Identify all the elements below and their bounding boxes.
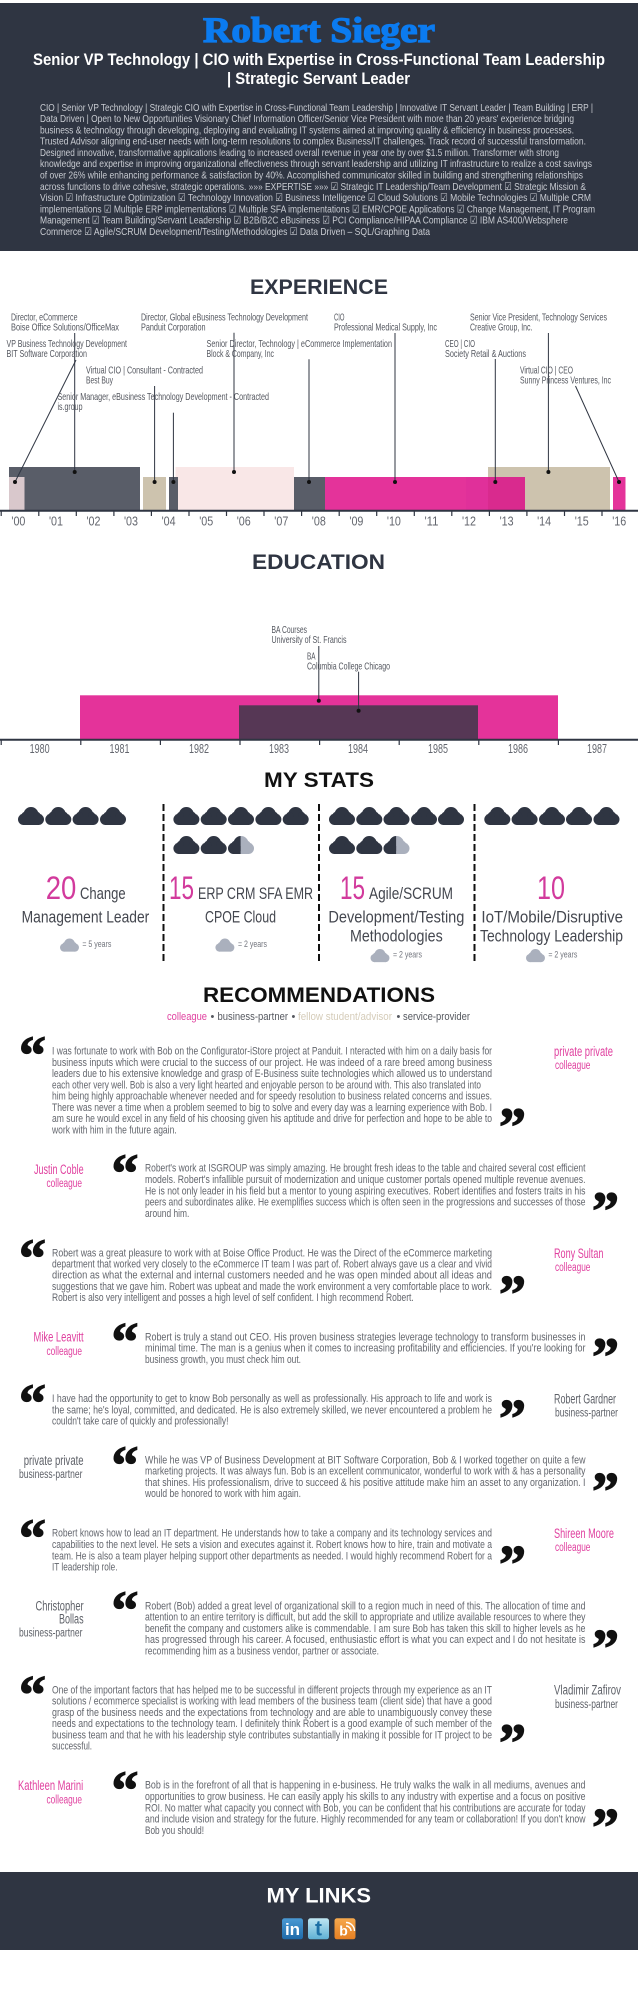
cloud legend [370, 949, 422, 962]
recommendation: Mike Leavitt [34, 1312, 619, 1387]
axis year labels: '11 [424, 514, 438, 529]
recommendation: private private, colleague: colleague [555, 1060, 590, 1072]
education year labels: 1987 [587, 741, 607, 756]
position labels: CEO | CIO [445, 338, 475, 350]
recommendation: Robert Gardner: couldn't take care of quickly and professionally! [52, 1416, 228, 1428]
recommendation: Christopher Bollas [19, 1580, 619, 1678]
recommendation: private private, colleague [19, 1025, 613, 1157]
recommendation: Kathleen Marini: Bob you should! [145, 1825, 204, 1837]
recommendation: private private, business-partner: “ [112, 1435, 138, 1495]
recommendation: Shireen Moore: “ [19, 1508, 46, 1568]
heading: recommendations: RECOMMENDATIONS [203, 984, 435, 1007]
axis year labels: '00 [11, 514, 25, 529]
position labels: Director, Global eBusiness Technology Development [141, 312, 308, 324]
recommendation: Shireen Moore: team. He is also a team player helping support other departments as needed. I would highly recommend Robert for a [52, 1550, 492, 1562]
recommendation: Rony Sultan: department that worked very closely to the eCommerce IT team I was part of. Robert always gave us a clear and vivid [52, 1258, 492, 1270]
recommendation: private private, business-partner: would be honored to work with him again. [144, 1488, 301, 1500]
recommendation: private private, colleague: I was fortunate to work with Bob on the Configurator-iStore project at Panduit. I nteracted with him on a daily basis for [52, 1046, 492, 1058]
axis year labels: '09 [349, 514, 363, 529]
recommendation: Shireen Moore: Robert knows how to lead an IT department. He understands how to take a company and its technology services and [52, 1528, 492, 1540]
education labels: Columbia College Chicago [307, 660, 390, 672]
recommendation: private private, colleague: him being highly approachable whenever needed and for speedy resolution to business related concerns and issues. [52, 1090, 492, 1102]
education leader lines [317, 646, 361, 713]
recommendation: Shireen Moore: ” [499, 1534, 526, 1594]
subtitle: | Strategic Servant Leader [227, 69, 410, 88]
position labels: Professional Medical Supply, Inc [334, 322, 437, 334]
recommendation: private private, colleague: private private [554, 1044, 613, 1059]
stat: ERP CRM SFA EMR CPOE Cloud: 15 [169, 870, 194, 906]
education year labels: 1986 [508, 741, 528, 756]
stat: ERP CRM SFA EMR CPOE Cloud: CPOE Cloud [205, 908, 276, 926]
axis year labels: '04 [162, 514, 176, 529]
recommendation: Kathleen Marini: “ [112, 1760, 138, 1820]
recommendation type legend: fellow student/advisor [298, 1011, 392, 1023]
icon: linkedin [282, 1918, 303, 1939]
stat: agile scrum: Agile/SCRUM [369, 884, 453, 903]
cloud pictogram [329, 807, 464, 854]
education labels: BA Courses [272, 624, 307, 636]
recommendation: Shireen Moore [19, 1508, 614, 1594]
recommendation: Christopher Bollas: business-partner [19, 1627, 83, 1639]
position labels: CIO [334, 312, 344, 324]
axis year labels: '05 [199, 514, 213, 529]
axis year labels: '03 [124, 514, 138, 529]
icon: blog: b [339, 1922, 348, 1938]
axis year labels: '15 [575, 514, 589, 529]
axis year labels: '01 [49, 514, 63, 529]
axis year labels: '16 [612, 514, 626, 529]
recommendation: Vladimir Zafirov: successful. [52, 1740, 92, 1752]
recommendation: Christopher Bollas: Bollas [59, 1612, 84, 1627]
cloud legend [526, 949, 578, 962]
icon: linkedin: in [285, 1920, 300, 1939]
dashed dividers [164, 804, 474, 961]
stat: iot mobile disruptive: 10 [537, 870, 565, 906]
recommendation: Kathleen Marini [18, 1760, 619, 1858]
recommendation: Justin Coble: ” [592, 1181, 619, 1241]
position labels: Virtual CIO | Consultant - Contracted [86, 365, 203, 377]
axis year labels: '13 [500, 514, 514, 529]
recommendation: Justin Coble: “ [112, 1143, 138, 1203]
recommendation: Rony Sultan: Rony Sultan [554, 1246, 603, 1261]
recommendation: private private, business-partner [19, 1435, 619, 1521]
timeline bars [9, 467, 626, 510]
position labels: Panduit Corporation [141, 322, 206, 334]
recommendation: Justin Coble: colleague [46, 1178, 82, 1190]
stat: change management leader: Change [80, 884, 126, 903]
recommendation: Mike Leavitt: business growth, you must check him out. [145, 1354, 301, 1366]
education year labels [30, 741, 607, 756]
axis year labels: '12 [462, 514, 476, 529]
recommendation: private private, business-partner: ” [592, 1461, 619, 1521]
stat: agile scrum: 15 [340, 870, 365, 906]
education axis [0, 740, 638, 745]
position labels: Best Buy [86, 375, 113, 387]
recommendation: private private, colleague: “ [19, 1025, 46, 1085]
recommendation: Rony Sultan: colleague [555, 1262, 590, 1274]
position labels: Block & Company, Inc [206, 348, 274, 360]
position labels: BIT Software Corporation [6, 348, 87, 360]
icon: twitter: t [315, 1918, 322, 1940]
recommendation: Robert Gardner: I have had the opportunity to get to know Bob personally as well as professionally. His approach to life and work is [52, 1393, 492, 1405]
position labels: Society Retail & Auctions [445, 348, 526, 360]
stat: agile scrum: Development/Testing [328, 908, 464, 926]
stat: change management leader: 20 [46, 870, 76, 906]
education bars [80, 695, 558, 739]
recommendation: Shireen Moore: IT leadership role. [52, 1562, 118, 1574]
axis year labels: '14 [537, 514, 551, 529]
recommendation: Vladimir Zafirov: grasp of the business needs and the expectations from technology and are able to unambiguously convey these [52, 1707, 492, 1719]
recommendation: Rony Sultan: Robert was a great pleasure to work with at Boise Office Product. He was the Direct of the eCommerce marketing [52, 1247, 492, 1259]
recommendation: Mike Leavitt: Mike Leavitt [34, 1330, 84, 1345]
education labels [272, 624, 390, 672]
recommendation: Justin Coble [34, 1143, 619, 1241]
icon: blog [334, 1918, 356, 1939]
education year labels: 1981 [110, 741, 130, 756]
heading: experience: EXPERIENCE [250, 276, 388, 299]
position labels: Senior Director, Technology | eCommerce Implementation [206, 338, 392, 350]
timeline axis [0, 511, 638, 516]
position labels: Senior Manager, eBusiness Technology Development - Contracted [58, 391, 269, 403]
recommendation: Christopher Bollas: recommending him as a business vendor, partner or associate. [145, 1646, 379, 1658]
header panel [0, 3, 638, 251]
title: Robert Sieger [203, 10, 435, 50]
education year labels: 1982 [189, 741, 209, 756]
position labels: Director, eCommerce [11, 312, 78, 324]
recommendation: Vladimir Zafirov [19, 1665, 621, 1773]
heading: my links: MY LINKS [266, 1885, 371, 1908]
recommendation: Kathleen Marini: colleague [46, 1794, 82, 1806]
recommendation: Robert Gardner [19, 1373, 618, 1448]
education timeline chart [0, 624, 638, 756]
recommendation: private private, colleague: am sure he would excel in any field of his choosing given his aptitude and drive for perfection and hope to be able to [52, 1113, 492, 1125]
recommendation: Justin Coble: Justin Coble [34, 1162, 84, 1177]
recommendation: private private, colleague: work with him in the future again. [51, 1124, 177, 1136]
stat: agile scrum [328, 807, 464, 962]
recommendation type legend: colleague [167, 1011, 207, 1023]
cloud pictogram [484, 807, 620, 825]
recommendation: private private, colleague: ” [499, 1097, 526, 1157]
recommendation: Shireen Moore: capabilities to the next level. He sets a vision and executes against it. Robert knows how to hire, train and motivate a [52, 1539, 492, 1551]
cloud legend: = 2 years [238, 939, 267, 949]
recommendation: Christopher Bollas: ” [592, 1618, 619, 1678]
heading: education: EDUCATION [252, 551, 385, 574]
recommendation: Rony Sultan: direction as what the external and internal customers needed and he was open minded about all ideas and [52, 1270, 492, 1282]
recommendation type legend: business-partner [218, 1011, 288, 1023]
recommendation: Vladimir Zafirov: needs and expectations to the technology team. I definitely think Robert is a good example of such member of the [52, 1718, 492, 1730]
recommendation type legend [167, 1011, 470, 1023]
recommendation type legend: • [210, 1011, 214, 1023]
leader lines and dots [13, 333, 621, 484]
profile summary text [40, 102, 595, 238]
recommendation: Robert Gardner: ” [499, 1388, 526, 1448]
recommendation: Kathleen Marini: Kathleen Marini [18, 1778, 83, 1793]
recommendation: Rony Sultan: “ [19, 1228, 46, 1288]
recommendation: private private, colleague: each other very well. Bob is also a very light hearted and enjoyable person to be around with. This also translated into [52, 1079, 481, 1091]
axis year labels: '10 [387, 514, 401, 529]
recommendation: Rony Sultan [19, 1228, 603, 1325]
recommendation: Robert Gardner: “ [19, 1373, 46, 1433]
recommendation: private private, colleague: There was never a time when a problem seemed to big to solve and every day was a learning experience with Bob. I [52, 1102, 492, 1114]
profile summary text: Commerce ☑ Agile/SCRUM Development/Testing/Methodologies ☑ Data Driven – SQL/Graphing Data [40, 226, 430, 238]
stat: iot mobile disruptive: IoT/Mobile/Disruptive [481, 908, 623, 926]
cloud pictogram [173, 807, 309, 854]
stat: agile scrum: Methodologies [350, 927, 443, 946]
stat: ERP CRM SFA EMR CPOE Cloud: ERP CRM SFA EMR [198, 884, 313, 903]
cloud legend [215, 938, 267, 952]
recommendation: Vladimir Zafirov: “ [19, 1665, 46, 1725]
recommendation: Christopher Bollas: Christopher [36, 1599, 84, 1614]
axis year labels: '08 [312, 514, 326, 529]
recommendation: Justin Coble: around him. [145, 1208, 189, 1220]
stat: ERP CRM SFA EMR CPOE Cloud [169, 807, 313, 952]
recommendation: private private, business-partner: business-partner [19, 1469, 83, 1481]
recommendation: Mike Leavitt: colleague [46, 1346, 82, 1358]
recommendation type legend: service-provider [403, 1011, 470, 1023]
education year labels: 1985 [428, 741, 448, 756]
recommendation type legend: • [292, 1011, 296, 1023]
stat: change management leader: Management Leader [22, 908, 150, 926]
stat: change management leader [18, 807, 150, 952]
position labels [6, 312, 611, 413]
position labels: Virtual CIO | CEO [520, 365, 573, 377]
cloud legend: = 2 years [548, 950, 578, 960]
footer panel: my links [0, 1872, 638, 1950]
heading: my stats: MY STATS [264, 769, 374, 792]
position labels: is.group [58, 401, 83, 413]
recommendation: Robert Gardner: the same; he's loyal, committed, and dedicated. He is also extremely skilled, we never encountered a problem he [52, 1404, 492, 1416]
education year labels: 1980 [30, 741, 50, 756]
recommendation: Christopher Bollas: “ [112, 1580, 138, 1640]
recommendation: Vladimir Zafirov: business team and that he with his leadership style contributes substantially in making it possible for IT project to be [52, 1730, 492, 1742]
education year labels: 1984 [348, 741, 368, 756]
cloud legend [60, 938, 112, 952]
stats panel [18, 804, 623, 962]
education labels: University of St. Francis [272, 634, 346, 646]
recommendation: private private, business-partner: private private [24, 1453, 84, 1468]
cloud legend: = 2 years [393, 950, 422, 960]
recommendation: private private, colleague: leaders due to his extensive knowledge and grasp of E-Business suite technologies which allowed us to understand [52, 1068, 492, 1080]
recommendation: Rony Sultan: Robert is also very intelligent and posses a high level of self confident. I high recommend Robert. [52, 1292, 414, 1304]
recommendation: Rony Sultan: suggestions that we gave him. Robert was upbeat and made the work environment a very comfortable place to work. [52, 1281, 492, 1293]
axis year labels [11, 514, 626, 529]
position labels: Creative Group, Inc. [470, 322, 532, 334]
position labels: Boise Office Solutions/OfficeMax [11, 322, 120, 334]
education labels: BA [307, 650, 316, 662]
recommendation type legend: • [396, 1011, 400, 1023]
recommendation: Vladimir Zafirov: ” [499, 1713, 526, 1773]
cloud pictogram [18, 807, 126, 825]
stat: iot mobile disruptive [480, 807, 623, 962]
experience timeline chart [0, 312, 638, 529]
axis year labels: '06 [237, 514, 251, 529]
position labels: VP Business Technology Development [6, 338, 127, 350]
recommendation: Mike Leavitt: ” [592, 1327, 619, 1387]
recommendation: Kathleen Marini: ” [592, 1798, 619, 1858]
icon: twitter [308, 1918, 329, 1940]
recommendation: Shireen Moore: colleague [555, 1542, 590, 1554]
recommendation: Vladimir Zafirov: solutions / ecommerce specialist is working with lead members of the business team (client side) that have a good [52, 1696, 492, 1708]
recommendation: Rony Sultan: ” [499, 1265, 526, 1325]
axis year labels: '02 [86, 514, 100, 529]
recommendation: Mike Leavitt: “ [112, 1312, 138, 1372]
recommendation: Vladimir Zafirov: One of the important factors that has helped me to be successful in different projects through my experience as an IT [52, 1684, 492, 1696]
axis year labels: '07 [274, 514, 288, 529]
cloud legend: = 5 years [82, 939, 112, 949]
education year labels: 1983 [269, 741, 289, 756]
subtitle [33, 50, 605, 88]
recommendation: private private, colleague: business inputs which were crucial to the success of our project. He was indeed of a rare breed among business [52, 1057, 492, 1069]
